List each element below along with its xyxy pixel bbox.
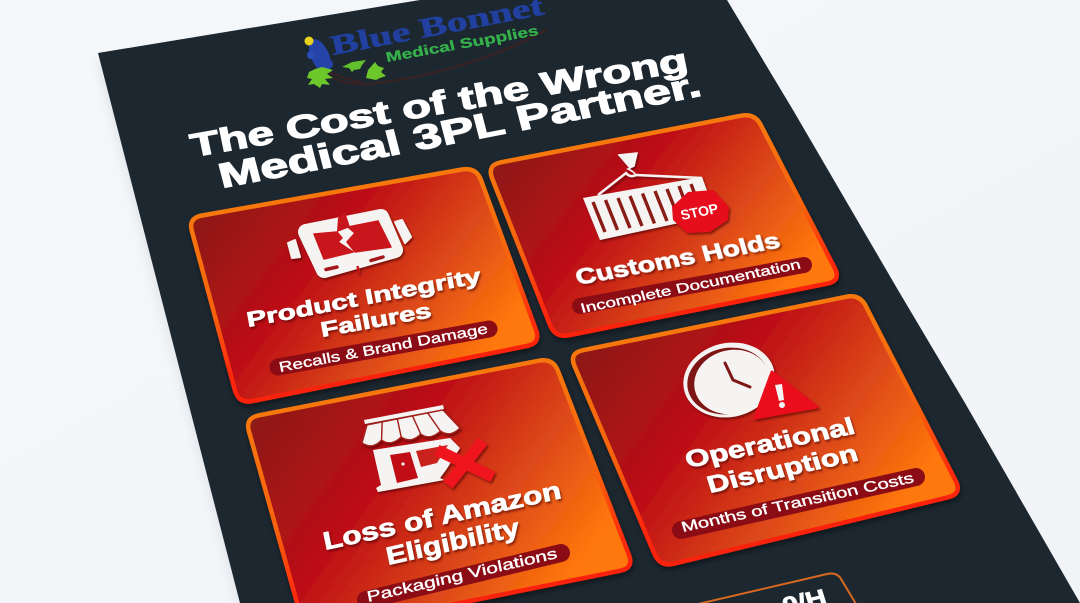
pill: Incomplete Documentation — [579, 257, 802, 316]
pill — [365, 545, 561, 603]
heading: Operational — [682, 413, 858, 474]
card: operational disruption — [573, 296, 958, 564]
card: customs holds — [491, 115, 837, 336]
logo: Blue Bonnet Medical Supplies: Medical Supplies — [384, 22, 540, 65]
heading: Failures — [319, 299, 433, 342]
card: loss of amazon eligibility — [248, 360, 630, 603]
icon: clock with warning triangle — [676, 334, 817, 426]
icon: container with stop sign: STOP — [679, 200, 720, 223]
heading — [682, 413, 861, 499]
heading: Loss of Amazon — [321, 476, 564, 556]
pill — [579, 257, 804, 316]
card: product integrity failures — [191, 169, 537, 402]
heading — [245, 264, 483, 342]
heading: Eligibility — [384, 513, 522, 571]
heading — [321, 476, 564, 571]
logo: Blue Bonnet Medical Supplies — [304, 0, 548, 88]
pill: Months of Transition Costs — [679, 471, 916, 536]
heading: Disruption — [704, 440, 861, 499]
icon: storefront with x — [362, 405, 493, 492]
icon: container with stop sign — [583, 153, 729, 240]
icon: broken tablet — [288, 212, 411, 273]
pill: Recalls & Brand Damage — [277, 320, 489, 375]
flower — [304, 36, 336, 76]
title: Medical 3PL Partner. — [214, 66, 705, 196]
title — [187, 41, 705, 196]
title: The Cost of the Wrong — [187, 41, 691, 164]
clipped bottom panel — [698, 574, 856, 603]
heading: Customs Holds — [572, 228, 783, 290]
pill — [679, 471, 916, 536]
pill — [277, 320, 489, 375]
heading: Product Integrity — [245, 264, 483, 332]
logo: Blue Bonnet Medical Supplies: Blue Bonnet — [328, 0, 548, 62]
